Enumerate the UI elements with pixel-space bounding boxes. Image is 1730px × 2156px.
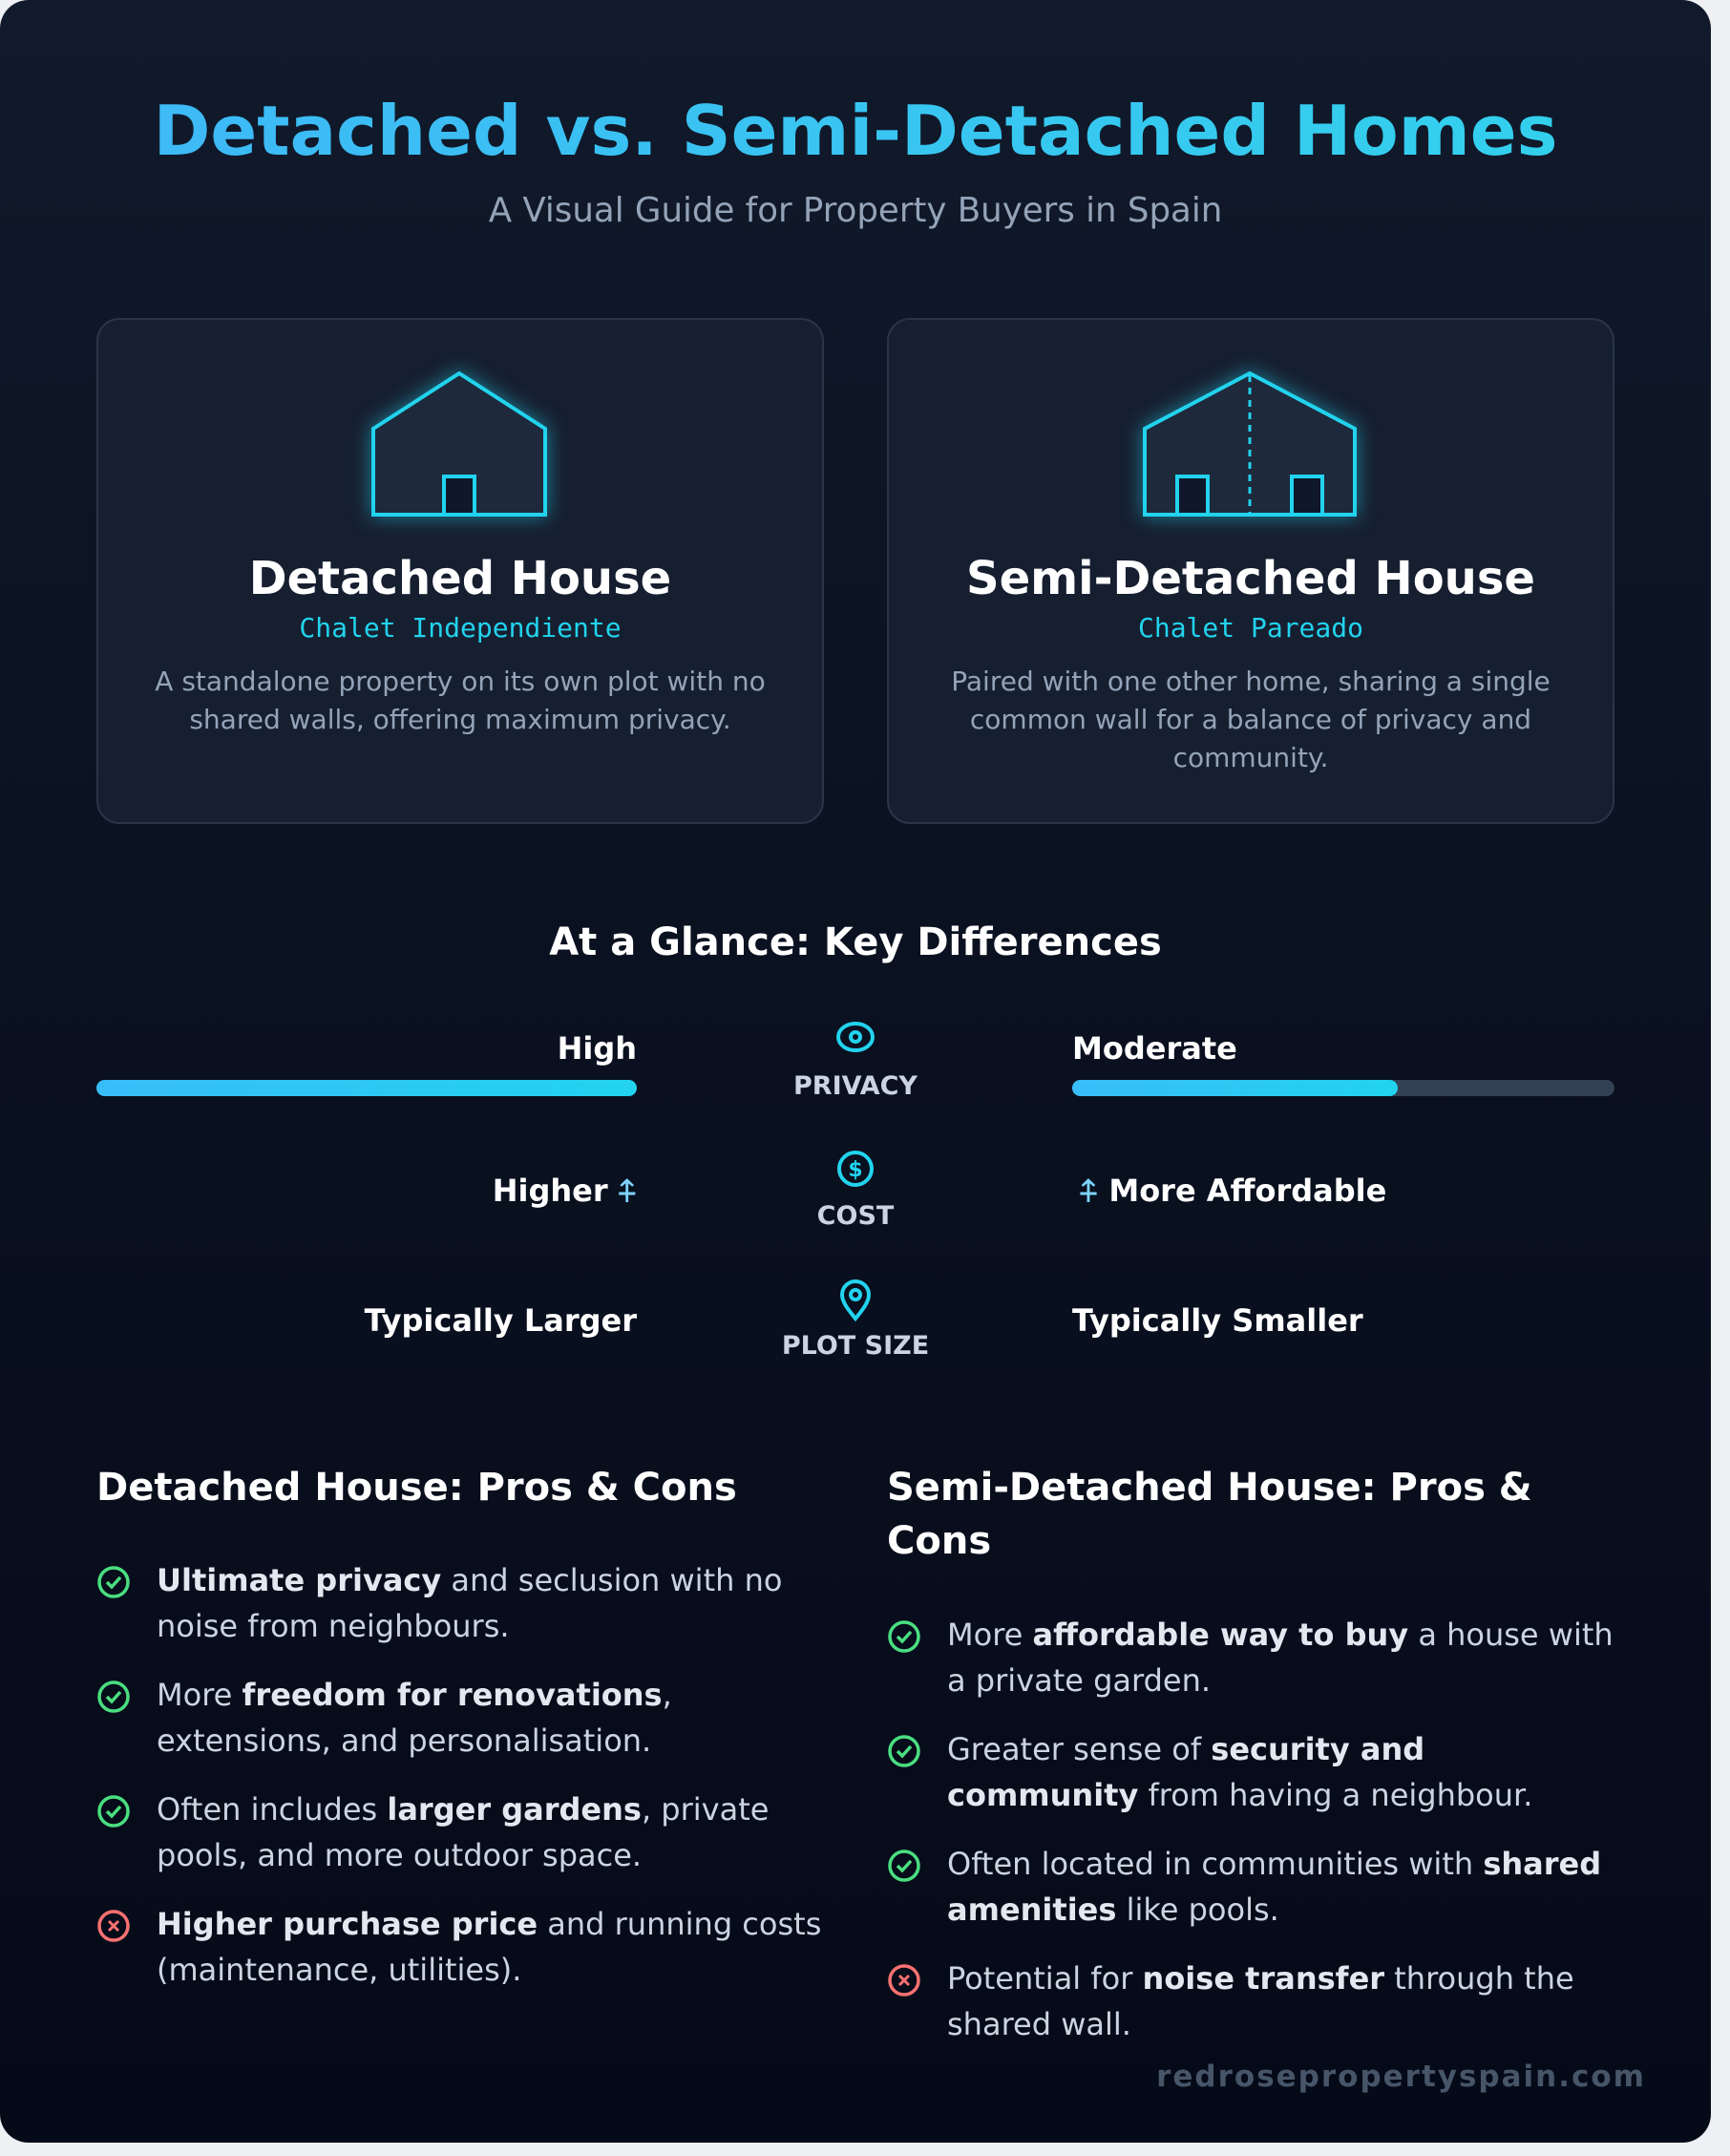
- footer: website: redrosepropertyspain.com: [1156, 2060, 1646, 2094]
- semi cost value: ⍏ More Affordable: [1080, 1173, 1386, 1209]
- row: privacy: [96, 1022, 1614, 1101]
- label privacy: PRIVACY: [793, 1071, 918, 1101]
- pro item: Greater sense of security and: [947, 1731, 1424, 1767]
- icon: money: $: [848, 1158, 863, 1182]
- icon: money: [837, 1151, 874, 1187]
- spanish name: Chalet Pareado: [1138, 612, 1363, 644]
- heading: semi-detached pros cons: Semi-Detached House: Pros & Cons: [887, 1466, 1532, 1563]
- description: Paired with one other home, sharing a single common wall for a balance of privacy and community.: [951, 666, 1551, 773]
- heading: detached pros cons: Detached House: Pros & Cons: [96, 1466, 737, 1510]
- pro item: More affordable way to buy a house with a private garden.: [947, 1617, 1614, 1699]
- label plot size: PLOT SIZE: [782, 1331, 929, 1361]
- pro item: Often includes larger gardens, private pools, and more outdoor space.: [157, 1791, 769, 1873]
- detached plot value: Typically Larger: [365, 1302, 637, 1339]
- detached cost value: Higher ⍏: [493, 1173, 637, 1209]
- title: Detached vs. Semi-Detached Homes: [154, 91, 1557, 171]
- list: semi-detached pros cons: [888, 1617, 1614, 2042]
- pro item: Often located in communities with shared amenities like pools.: [947, 1846, 1601, 1928]
- heading: at a glance: At a Glance: Key Differences: [549, 920, 1162, 964]
- icon: semi-detached house: [1130, 362, 1369, 529]
- semi plot value: Typically Smaller: [1072, 1302, 1363, 1339]
- pro item: More freedom for renovations, extensions, and personalisation.: [157, 1677, 672, 1759]
- semi privacy bar: [1072, 1080, 1614, 1096]
- list: detached pros cons: [97, 1562, 821, 1988]
- semi privacy value: Moderate: [1072, 1030, 1237, 1067]
- spanish name: Chalet Independiente: [299, 612, 622, 644]
- detached privacy value: High: [558, 1030, 637, 1067]
- icon: eye: [836, 1022, 875, 1052]
- row: plot size: [365, 1279, 1363, 1361]
- subtitle: A Visual Guide for Property Buyers in Spain: [489, 191, 1222, 230]
- pro item: Ultimate privacy and seclusion with no noise from neighbours.: [157, 1562, 782, 1644]
- card title: Semi-Detached House: [966, 552, 1535, 605]
- card title: Detached House: [249, 552, 671, 605]
- pro item: [888, 1731, 1532, 1813]
- con item: Higher purchase price and running costs (maintenance, utilities).: [157, 1906, 821, 1988]
- description: A standalone property on its own plot with no shared walls, offering maximum privacy.: [155, 666, 766, 735]
- icon: location pin: [840, 1279, 871, 1321]
- detached privacy bar: [96, 1080, 637, 1096]
- pro item: community from having a neighbour.: [947, 1777, 1532, 1813]
- panel: detached house: [96, 318, 824, 824]
- panel: semi-detached house: [887, 318, 1614, 824]
- row: cost: [493, 1151, 1386, 1231]
- label cost: COST: [817, 1201, 894, 1231]
- icon: detached house: [359, 363, 559, 529]
- con item: Potential for noise transfer through the shared wall.: [947, 1960, 1574, 2042]
